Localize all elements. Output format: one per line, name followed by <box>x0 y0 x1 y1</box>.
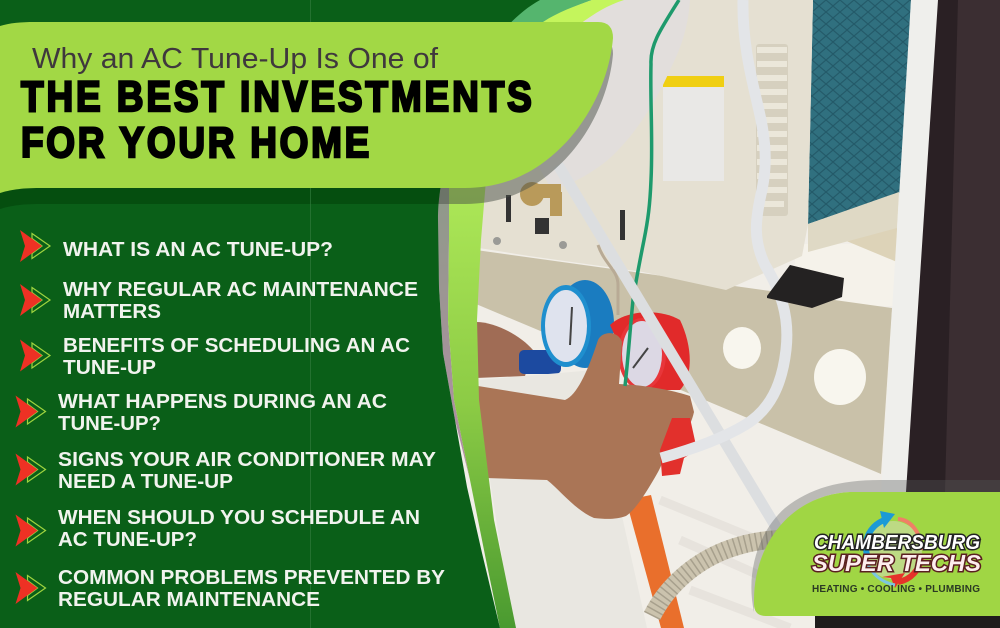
photo: dark strip under logo <box>815 612 1000 628</box>
photo: foam insulated pipe <box>500 0 690 190</box>
item text line two: AC TUNE-UP? <box>58 529 197 551</box>
photo: rear hand <box>476 322 533 378</box>
photo: gauge hook <box>598 245 618 315</box>
item text line two: REGULAR MAINTENANCE <box>58 589 320 611</box>
list item 3 <box>20 335 410 379</box>
item text line two: TUNE-UP? <box>58 413 161 435</box>
item text line two: TUNE-UP <box>63 357 156 379</box>
guide line <box>310 0 312 628</box>
item text: WHAT IS AN AC TUNE-UP? <box>63 239 333 261</box>
arrow icon <box>16 396 46 428</box>
photo: vent louvers <box>756 44 788 216</box>
top arc: medium green <box>504 0 592 24</box>
arrow icon <box>20 230 50 262</box>
photo: technician hand <box>478 333 694 519</box>
item text: WHAT HAPPENS DURING AN AC <box>58 391 387 413</box>
arrow icon <box>16 514 46 546</box>
item text: WHEN SHOULD YOU SCHEDULE AN <box>58 507 420 529</box>
panel: dark green background <box>0 0 540 628</box>
photo: red gauge <box>610 312 690 390</box>
photo: white label <box>663 87 724 181</box>
panel: title banner <box>0 22 613 193</box>
item text: COMMON PROBLEMS PREVENTED BY <box>58 567 446 589</box>
logo panel halo <box>751 480 1000 612</box>
logo: Chambersburg wordmark: CHAMBERSBURG <box>814 532 980 554</box>
logo: swirl globe <box>864 511 922 588</box>
photo: bright wall behind unit <box>795 244 897 306</box>
logo: Super Techs wordmark: SUPER TECHS <box>812 550 982 576</box>
list item 7 <box>16 567 446 611</box>
photo: AC unit casing <box>478 0 813 290</box>
photo: yellow label <box>663 76 724 87</box>
photo: frame highlight <box>945 0 1000 492</box>
photo: white coiled cable <box>661 0 787 458</box>
arrow icon <box>20 340 50 372</box>
curved gray strip <box>436 180 470 480</box>
photo: floor stripes <box>660 500 880 628</box>
header shadow on green <box>0 188 440 209</box>
arrow icon <box>20 284 50 316</box>
curved lime strip <box>448 180 516 628</box>
title: line two: FOR YOUR HOME <box>21 119 369 167</box>
title: line one: THE BEST INVESTMENTS <box>21 73 532 121</box>
item text line two: MATTERS <box>63 301 161 323</box>
photo: grille tray <box>808 192 899 252</box>
arrow icon <box>16 572 46 604</box>
list item 5 <box>16 449 437 493</box>
list item 1 <box>20 230 333 262</box>
photo: tan ledge <box>844 226 897 262</box>
list item 6 <box>16 507 420 551</box>
photo: technician servicing an outdoor AC unit <box>440 0 1000 628</box>
photo: white window frame <box>881 0 938 492</box>
logo: services tagline: HEATING • COOLING • PLUMBING <box>812 584 980 595</box>
panel: logo badge <box>754 492 1000 616</box>
photo: green wire <box>625 0 679 386</box>
photo: unit slots and screws <box>493 195 625 249</box>
photo: bracket <box>767 265 844 308</box>
photo: beam holes <box>723 327 866 405</box>
item text: SIGNS YOUR AIR CONDITIONER MAY <box>58 449 437 471</box>
photo: corrugated hose <box>652 538 790 616</box>
photo: condenser grille <box>808 0 911 224</box>
title: intro line: Why an AC Tune-Up Is One of <box>32 43 439 75</box>
photo: brass valve <box>520 182 562 216</box>
top arc: lime <box>543 0 624 24</box>
photo: red lower knob <box>660 418 697 476</box>
photo: mounting beam <box>476 250 892 474</box>
header shadow over photo <box>0 38 613 209</box>
item text line two: NEED A TUNE-UP <box>58 471 233 493</box>
photo: blue gauge <box>541 280 614 368</box>
photo: white diagonal cable <box>558 165 779 532</box>
item text: BENEFITS OF SCHEDULING AN AC <box>63 335 410 357</box>
photo: dark door frame <box>880 0 1000 628</box>
photo: white container <box>479 370 647 628</box>
item text: WHY REGULAR AC MAINTENANCE <box>63 279 418 301</box>
list item 4 <box>16 391 387 435</box>
list item 2 <box>20 279 418 323</box>
photo: orange stand leg <box>626 495 684 628</box>
arrow icon <box>16 454 46 486</box>
photo: blue knob <box>519 350 561 374</box>
